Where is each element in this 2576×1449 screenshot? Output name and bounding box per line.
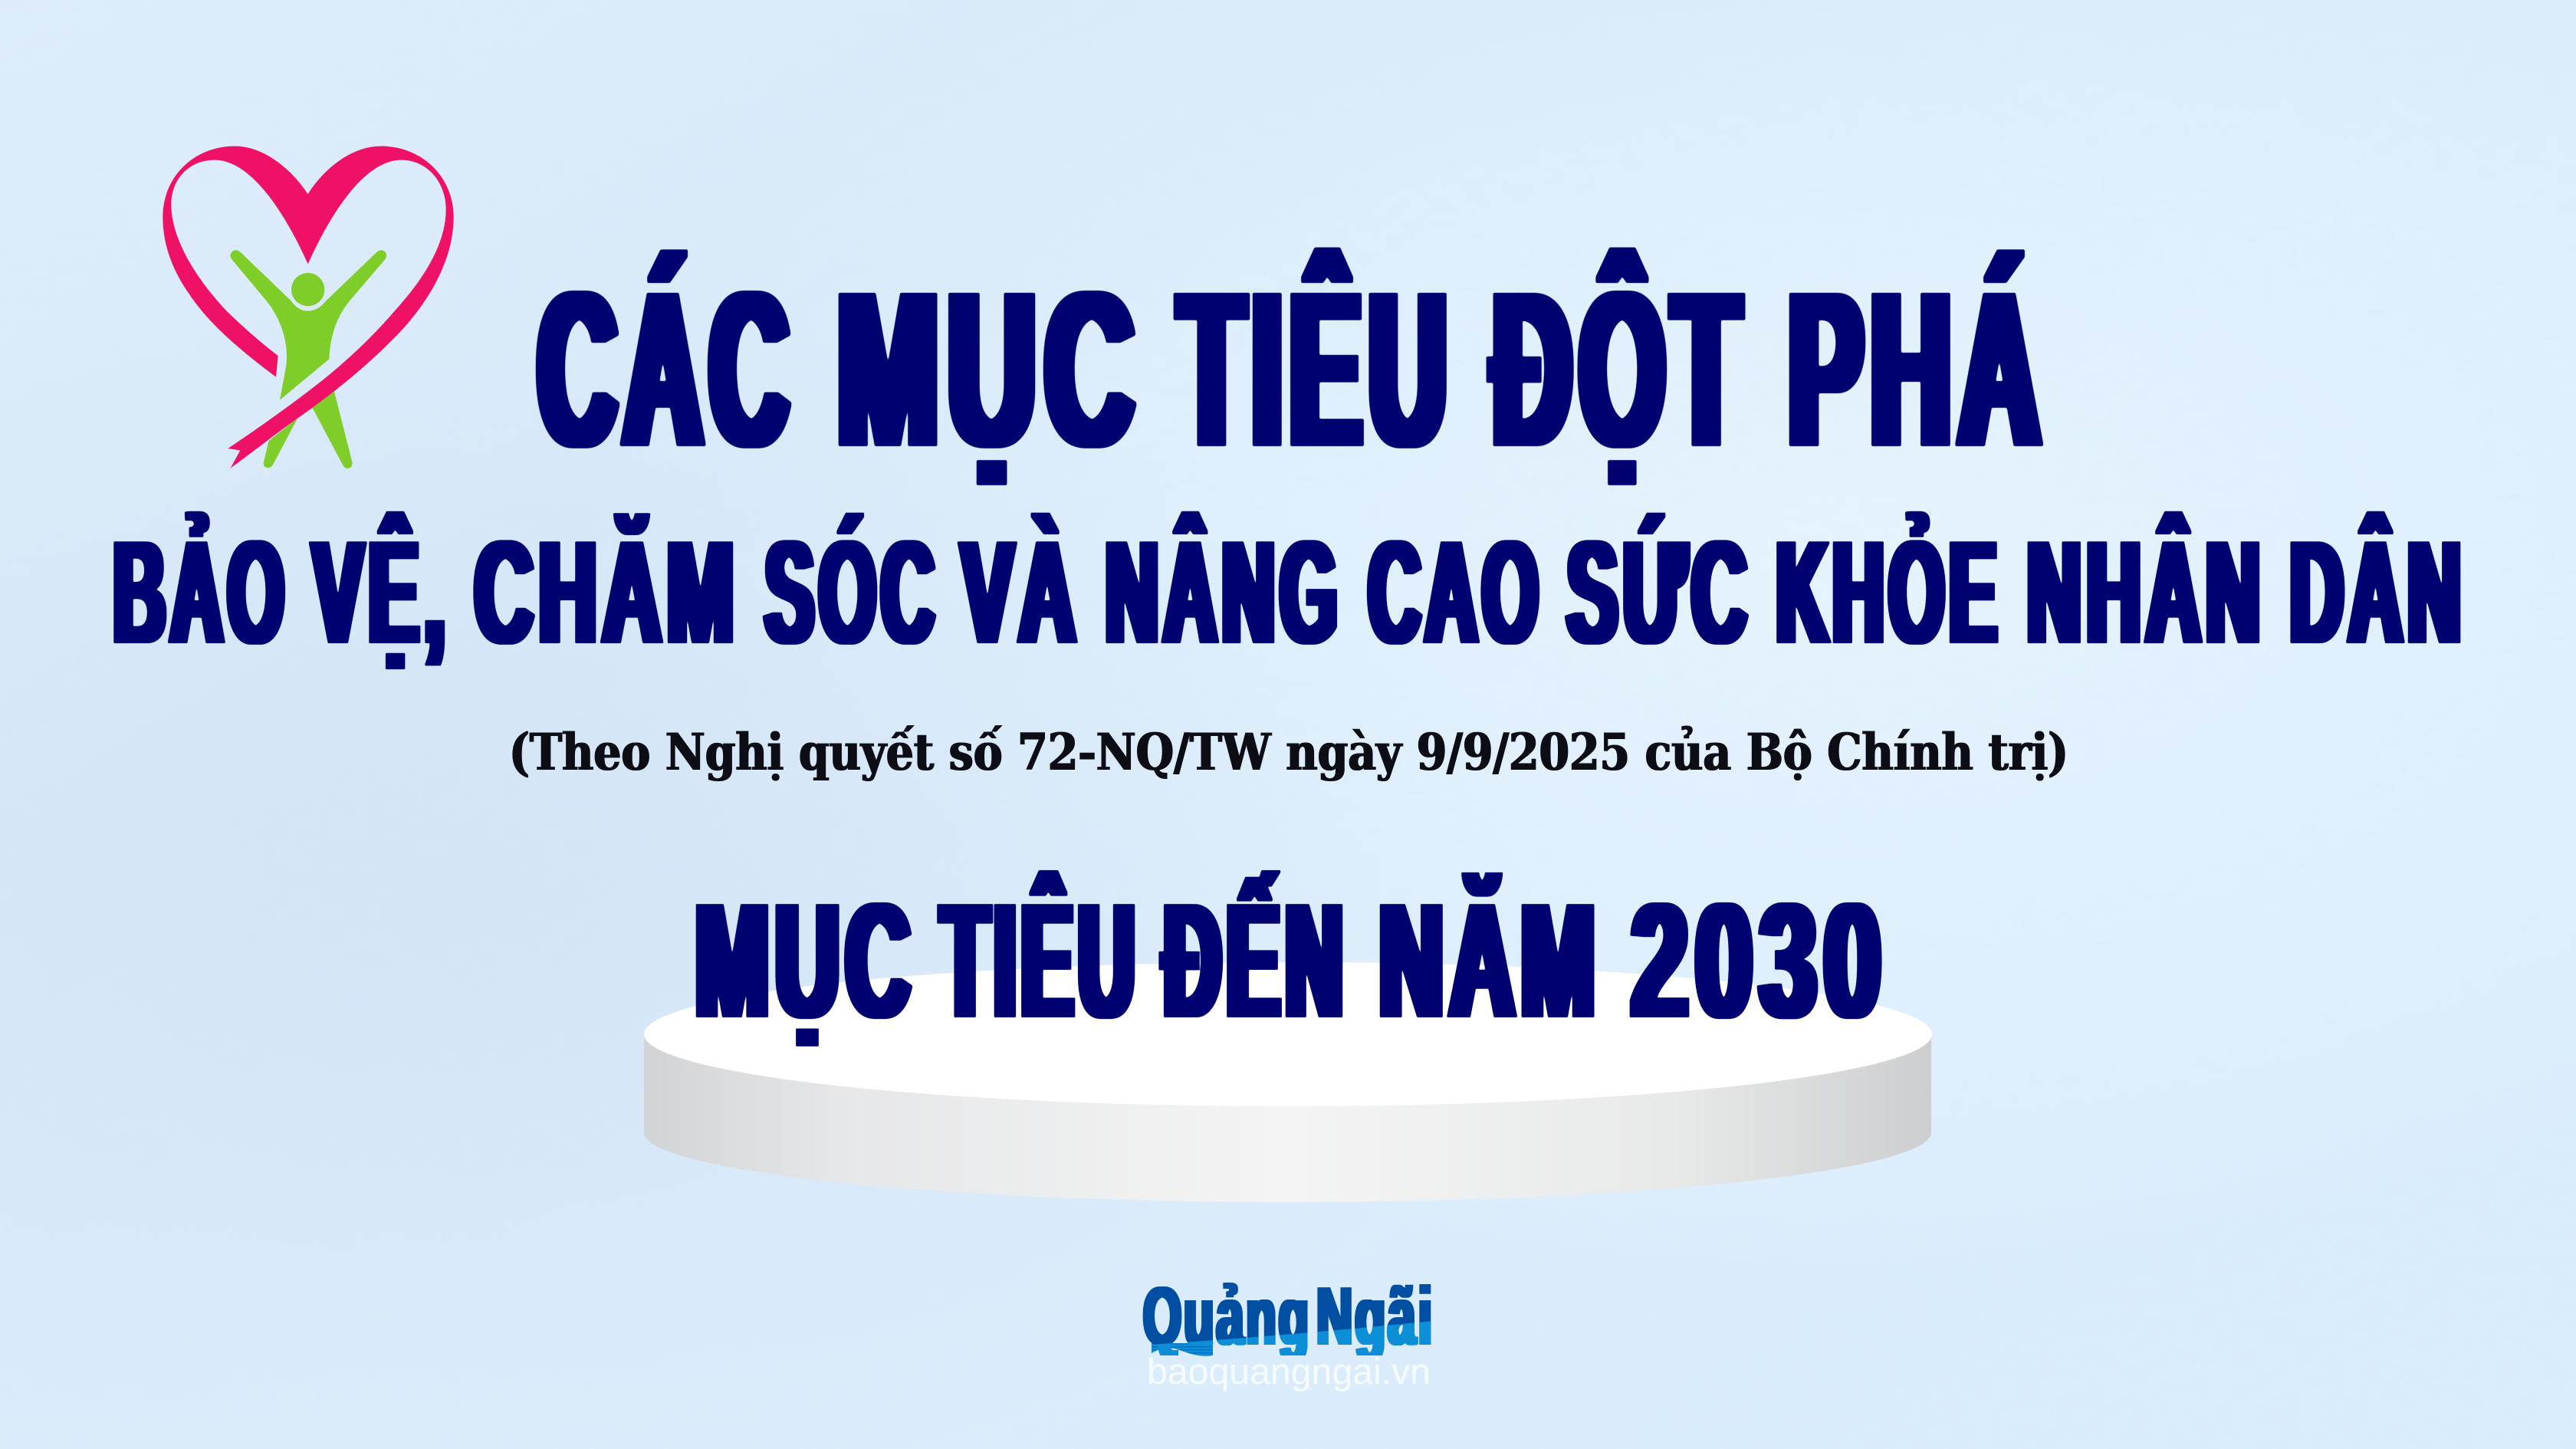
logo wordmark: Ngãi — [1316, 1271, 1434, 1362]
subtitle: NÂNG — [1106, 511, 1342, 674]
subtitle: SÓC — [765, 511, 939, 674]
icon: ribbon — [163, 146, 454, 468]
heading: target 2030 — [695, 869, 1888, 1051]
subtitle: VỆ, — [313, 511, 451, 674]
logo: Quảng Ngãi — [1142, 1282, 1431, 1392]
logo wave — [1152, 1343, 1213, 1356]
heading: target 2030: 2030 — [1631, 869, 1888, 1051]
icon: heart ribbon with person — [163, 146, 454, 468]
title: TIÊU — [1179, 247, 1454, 491]
subtitle: SỨC — [1567, 511, 1752, 674]
heading: target 2030: TIÊU — [941, 869, 1140, 1051]
heading: target 2030: NĂM — [1379, 869, 1602, 1051]
subtitle: VÀ — [961, 511, 1081, 674]
subtitle: KHỎE — [1776, 511, 2002, 674]
subtitle: CHĂM — [475, 511, 740, 674]
title — [538, 247, 2048, 491]
subtitle: NHÂN — [2027, 511, 2266, 674]
source note: (Theo Nghị quyết số 72-NQ/TW ngày 9/9/2025 của Bộ Chính trị) — [509, 722, 2068, 782]
heading: target 2030: ĐẾN — [1164, 869, 1349, 1051]
icon: person — [231, 250, 386, 468]
subtitle: CAO — [1368, 511, 1543, 674]
logo wordmark: Quảng — [1143, 1271, 1311, 1362]
heading: target 2030: MỤC — [695, 869, 916, 1051]
logo wordmark: Ngãi — [1316, 1271, 1434, 1362]
title: CÁC — [538, 248, 796, 491]
subtitle: BẢO — [113, 511, 289, 674]
logo wordmark: Quảng — [1143, 1271, 1311, 1362]
title: MỤC — [837, 248, 1142, 491]
logo website: baoquangngai.vn — [1147, 1351, 1431, 1392]
podium — [644, 962, 1932, 1202]
title: ĐỘT — [1493, 247, 1748, 491]
title: PHÁ — [1789, 248, 2048, 491]
subtitle — [113, 511, 2466, 674]
